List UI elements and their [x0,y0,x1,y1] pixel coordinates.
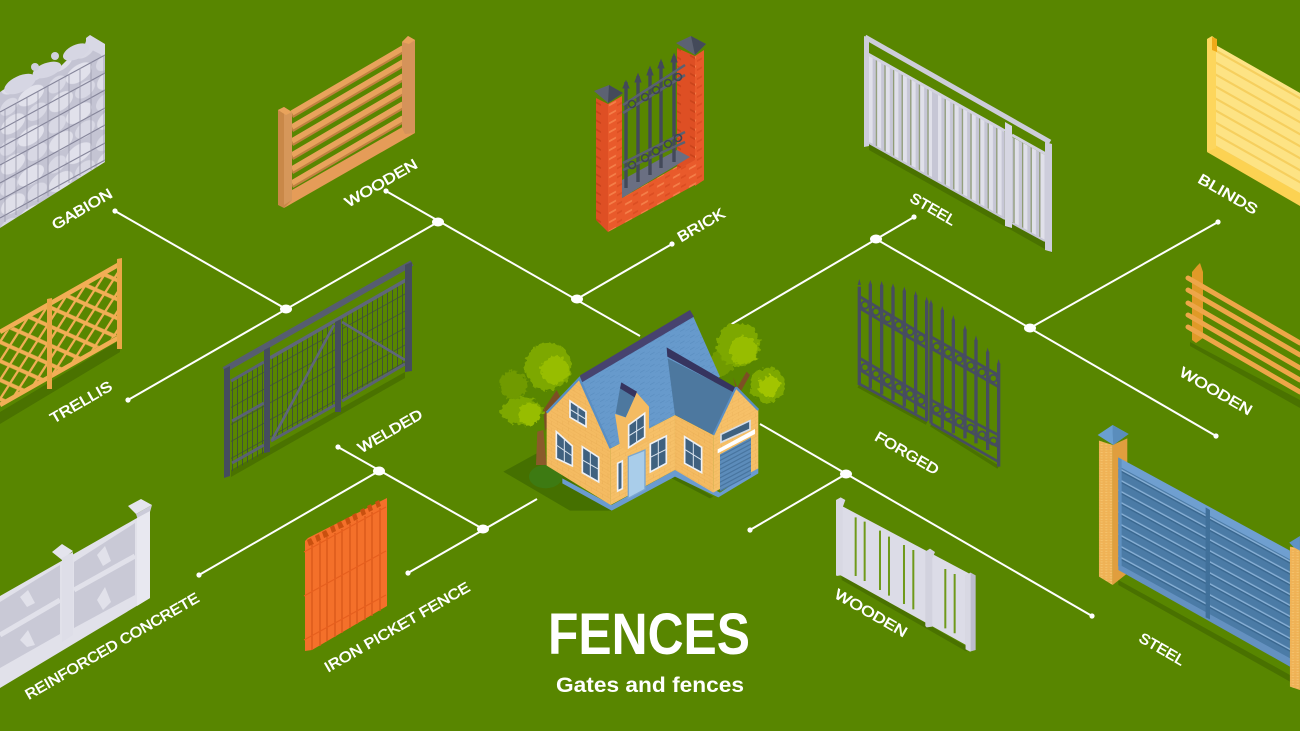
fence: brick with wrought iron [594,36,706,232]
label: forged: FORGED [872,429,941,479]
label: wooden rails: WOODEN [1176,365,1255,419]
fence: blinds [1207,36,1300,206]
tree: right [709,323,785,402]
main roof [581,317,720,448]
door [628,450,645,498]
label: gabion: GABION [49,186,116,234]
ground shadow [503,453,612,511]
fence: steel gate [864,36,1052,253]
label: wooden boards: WOODEN [831,587,910,641]
fence: steel slats with pillars [1098,425,1300,690]
label: wooden slats: WOODEN [342,157,421,211]
label: trellis: TRELLIS [48,379,115,427]
label: welded: WELDED [355,407,426,457]
walls [547,378,611,505]
fence: trellis [0,258,122,424]
fence: white boards [836,497,976,652]
bush [529,465,562,488]
label: brick: BRICK [675,206,728,246]
label: iron picket fence: IRON PICKET FENCE [322,580,473,676]
connector lines [112,188,1221,619]
garage door [720,437,751,492]
gable roof [668,358,733,435]
tree: left [499,343,572,465]
fence: wooden horizontal slats [278,36,415,208]
label: reinforced concrete: REINFORCED CONCRETE [23,590,203,703]
subtitle: Gates and fences [556,674,744,697]
label: steel top: STEEL [907,190,958,229]
fence: iron picket [304,498,387,651]
title: FENCES [548,602,750,667]
windows [556,401,750,491]
label: steel slats: STEEL [1136,630,1187,669]
foundation [562,468,758,511]
central house [499,310,785,511]
fence: gabion [0,35,105,228]
fence: forged gate [858,279,1000,467]
dormer [615,393,649,451]
fence: wooden rails [1188,263,1300,408]
fence: reinforced concrete [0,499,152,688]
fence: welded gate [224,262,412,478]
label: blinds: BLINDS [1195,171,1260,218]
